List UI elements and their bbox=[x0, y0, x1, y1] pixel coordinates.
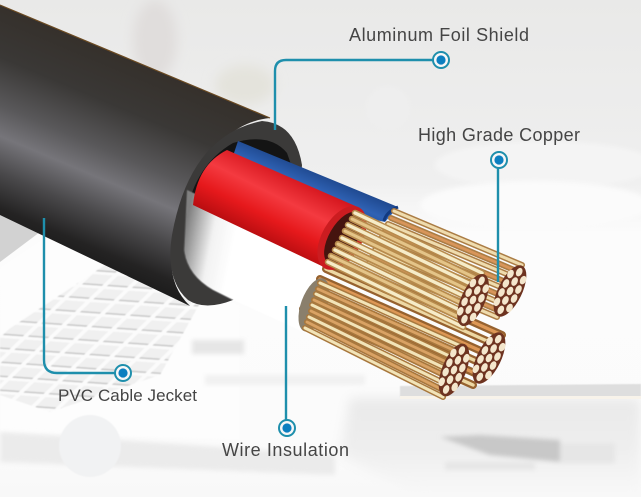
copper end face: lower back bundle bbox=[466, 328, 512, 388]
red wire core hole bbox=[316, 206, 370, 270]
pen bbox=[440, 435, 615, 470]
callout: High Grade Copper bbox=[418, 125, 580, 282]
jacket opening bbox=[184, 139, 300, 300]
callout: Wire Insulation: Wire Insulation bbox=[222, 440, 349, 460]
laptop bbox=[0, 205, 365, 477]
white wire insulation bbox=[184, 190, 345, 335]
copper strands: red wire bundle bbox=[328, 213, 482, 327]
jacket rim bbox=[170, 121, 302, 306]
copper strands: lower back bundle bbox=[303, 259, 502, 385]
cable jacket bbox=[0, 5, 302, 306]
copper end face: red wire bundle bbox=[451, 270, 495, 330]
copper end face: back bundle bbox=[487, 261, 533, 321]
callout: Wire Insulation bbox=[222, 306, 349, 460]
red wire end ring bbox=[307, 198, 377, 278]
copper strands: white wire bundle bbox=[292, 274, 463, 397]
callout: Aluminum Foil Shield: Aluminum Foil Shield bbox=[349, 25, 529, 45]
callout: Aluminum Foil Shield bbox=[275, 25, 529, 130]
copper strands: back bundle bbox=[369, 211, 522, 317]
red wire insulation bbox=[193, 150, 377, 278]
callout: PVC Cable Jecket: PVC Cable Jecket bbox=[58, 386, 197, 405]
callout: High Grade Copper: High Grade Copper bbox=[418, 125, 580, 145]
callout: PVC Cable Jecket bbox=[44, 218, 197, 405]
blue wire insulation bbox=[230, 141, 398, 222]
copper end face: white wire bundle bbox=[432, 340, 476, 400]
